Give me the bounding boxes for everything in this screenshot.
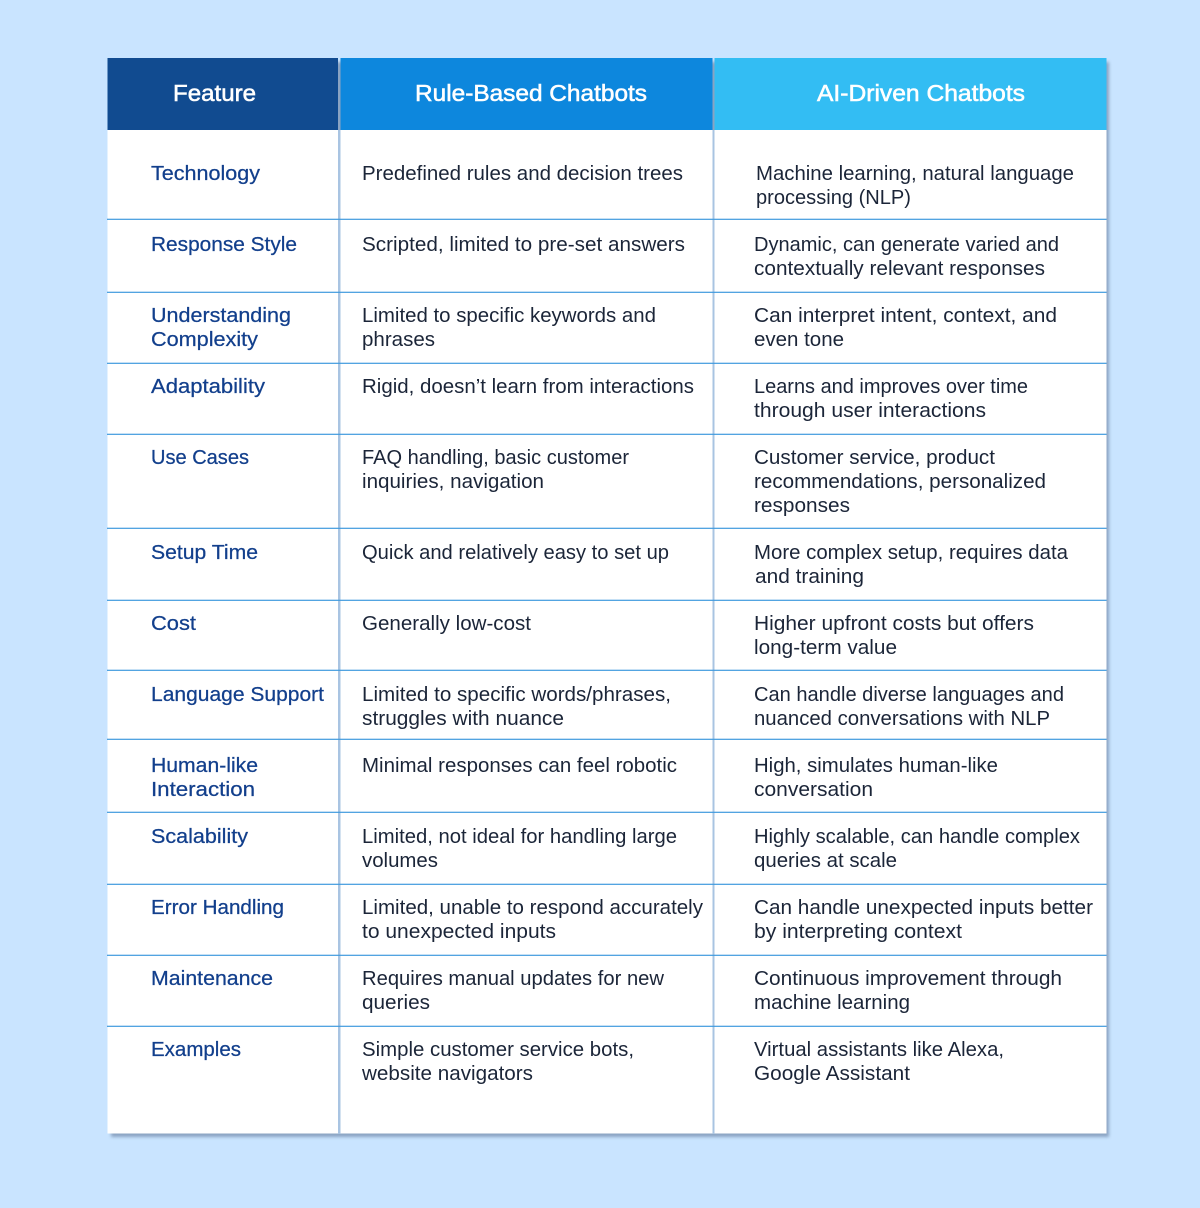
row: Scalability [151, 825, 1081, 872]
rule-based cell: Minimal responses can feel robotic [362, 754, 677, 777]
header row [108, 58, 1106, 130]
feature label: Cost [151, 612, 196, 635]
row: Cost [151, 612, 1034, 659]
rule-based cell: Limited, not ideal for handling large [362, 825, 677, 848]
rule-based cell: struggles with nuance [362, 707, 564, 730]
rule-based cell: FAQ handling, basic customer [362, 446, 629, 469]
header: Feature: Feature [173, 80, 256, 106]
header: AI-Driven Chatbots: AI-Driven Chatbots [817, 80, 1025, 106]
row: Maintenance [151, 967, 1062, 1014]
table card shadow [111, 62, 1109, 1137]
AI-driven cell: Can handle unexpected inputs better [754, 896, 1093, 919]
row: Technology [151, 162, 1074, 209]
row: Examples [151, 1038, 1004, 1085]
feature label: Response Style [151, 233, 297, 256]
rule-based cell: Limited, unable to respond accurately [362, 896, 704, 919]
AI-driven cell [754, 896, 1093, 943]
AI-driven cell: through user interactions [754, 399, 986, 422]
feature label: Maintenance [151, 967, 273, 990]
feature label: Human-like [151, 754, 258, 777]
feature label: Interaction [151, 778, 255, 801]
AI-driven cell: conversation [754, 778, 873, 801]
rule-based cell: Limited to specific keywords and [362, 304, 656, 327]
table body panel [108, 130, 1106, 1134]
feature label: Complexity [151, 328, 259, 351]
header: Rule-Based Chatbots [340, 58, 712, 130]
AI-driven cell: Dynamic, can generate varied and [754, 233, 1059, 256]
rule-based cell: Scripted, limited to pre-set answers [362, 233, 685, 256]
AI-driven cell: and training [755, 565, 864, 588]
header: Feature [108, 58, 338, 130]
rule-based cell [362, 446, 629, 493]
feature label: Use Cases [151, 446, 249, 469]
AI-driven cell: Highly scalable, can handle complex [754, 825, 1081, 848]
row: Setup Time [151, 541, 1069, 588]
AI-driven cell [754, 825, 1081, 872]
rule-based cell: Quick and relatively easy to set up [362, 541, 669, 564]
AI-driven cell [754, 683, 1064, 730]
row: Language Support [151, 683, 1064, 730]
feature label: Language Support [151, 683, 324, 706]
rule-based cell: Generally low-cost [362, 612, 531, 635]
row: Understanding Complexity [151, 304, 1057, 351]
rule-based cell [362, 683, 671, 730]
rule-based cell: volumes [362, 849, 438, 872]
AI-driven cell [756, 162, 1074, 209]
rule-based cell: Simple customer service bots, [362, 1038, 634, 1061]
rule-based cell: Requires manual updates for new [362, 967, 664, 990]
feature label [151, 304, 291, 351]
feature label: Error Handling [151, 896, 284, 919]
row: Adaptability [151, 375, 1028, 422]
feature label: Adaptability [151, 375, 266, 398]
AI-driven cell: Learns and improves over time [754, 375, 1028, 398]
feature label: Setup Time [151, 541, 258, 564]
AI-driven cell: Higher upfront costs but offers [754, 612, 1034, 635]
rule-based cell [362, 304, 656, 351]
AI-driven cell [754, 304, 1057, 351]
rule-based cell [362, 967, 664, 1014]
header: AI-Driven Chatbots [714, 58, 1106, 130]
feature label: Technology [151, 162, 261, 185]
row: Human-like Interaction [151, 754, 998, 801]
AI-driven cell [754, 446, 1046, 517]
row dividers [107, 219, 1106, 1027]
AI-driven cell: Continuous improvement through [754, 967, 1062, 990]
rule-based cell: Predefined rules and decision trees [362, 162, 683, 185]
AI-driven cell: contextually relevant responses [754, 257, 1045, 280]
AI-driven cell: even tone [754, 328, 844, 351]
AI-driven cell: More complex setup, requires data [754, 541, 1069, 564]
AI-driven cell: long-term value [754, 636, 897, 659]
AI-driven cell: Can interpret intent, context, and [754, 304, 1057, 327]
feature label: Examples [151, 1038, 241, 1061]
rule-based cell: to unexpected inputs [362, 920, 556, 943]
AI-driven cell: Can handle diverse languages and [754, 683, 1064, 706]
AI-driven cell [754, 612, 1034, 659]
AI-driven cell: Virtual assistants like Alexa, [754, 1038, 1004, 1061]
header: Rule-Based Chatbots: Rule-Based Chatbots [415, 80, 647, 106]
rule-based cell [362, 896, 704, 943]
AI-driven cell: Google Assistant [754, 1062, 910, 1085]
AI-driven cell: machine learning [754, 991, 910, 1014]
rule-based cell [362, 825, 677, 872]
row: Use Cases [151, 446, 1046, 517]
row: Error Handling [151, 896, 1093, 943]
rule-based cell [361, 1038, 634, 1085]
rule-based cell: phrases [362, 328, 435, 351]
AI-driven cell [754, 754, 998, 801]
AI-driven cell: High, simulates human-like [754, 754, 998, 777]
AI-driven cell [754, 375, 1028, 422]
feature label [151, 754, 258, 801]
AI-driven cell: Customer service, product [754, 446, 995, 469]
AI-driven cell: processing (NLP) [756, 186, 911, 209]
rule-based cell: Rigid, doesn’t learn from interactions [362, 375, 694, 398]
AI-driven cell [754, 967, 1062, 1014]
feature label: Understanding [151, 304, 291, 327]
AI-driven cell: Machine learning, natural language [756, 162, 1074, 185]
AI-driven cell: recommendations, personalized [754, 470, 1046, 493]
AI-driven cell [754, 1038, 1004, 1085]
AI-driven cell [754, 233, 1059, 280]
column dividers [338, 130, 714, 1134]
rule-based cell: inquiries, navigation [362, 470, 544, 493]
rule-based cell: website navigators [361, 1062, 533, 1085]
feature label: Scalability [151, 825, 249, 848]
rule-based cell: Limited to specific words/phrases, [362, 683, 671, 706]
AI-driven cell: by interpreting context [754, 920, 962, 943]
AI-driven cell: nuanced conversations with NLP [754, 707, 1050, 730]
row: Response Style [151, 233, 1059, 280]
AI-driven cell [754, 541, 1069, 588]
rule-based cell: queries [362, 991, 430, 1014]
AI-driven cell: queries at scale [754, 849, 897, 872]
AI-driven cell: responses [754, 494, 850, 517]
